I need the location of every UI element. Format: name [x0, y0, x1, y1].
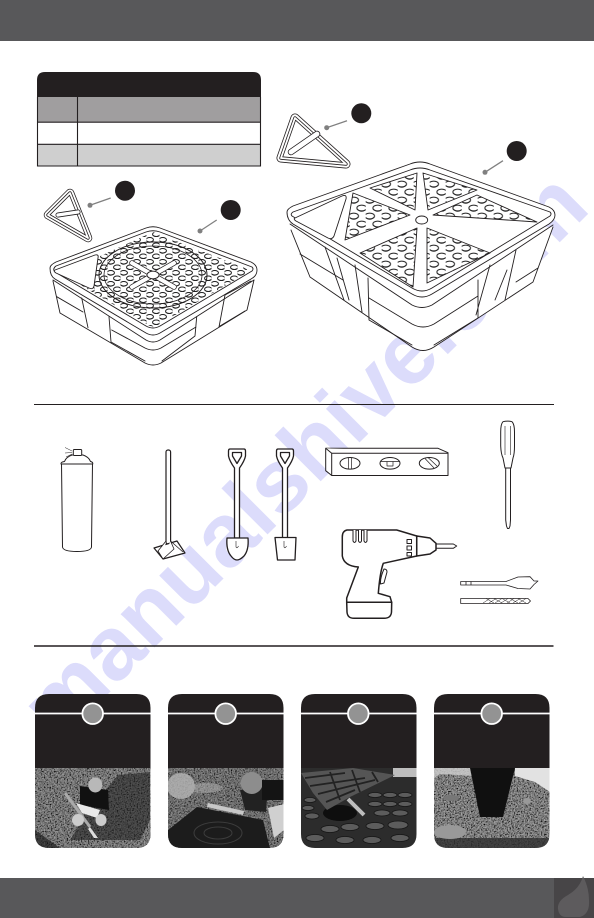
- icon: spade bit: [461, 577, 538, 589]
- icon: screwdriver: [501, 421, 514, 528]
- page tab: [554, 878, 594, 918]
- step card 3: [301, 694, 417, 848]
- table row 2: [38, 122, 260, 144]
- card 1 header: [35, 694, 150, 768]
- icon: flame drop: [558, 876, 589, 917]
- table row 3: [38, 144, 260, 166]
- wedge hole grid: [346, 174, 531, 286]
- spoke star: [132, 263, 174, 287]
- large empty corner: [294, 195, 346, 239]
- step card 4: [434, 694, 550, 848]
- card 3 number badge: [348, 703, 369, 724]
- large container body: [291, 227, 553, 350]
- icon: hand tamper: [154, 450, 185, 559]
- container body: [53, 280, 254, 365]
- wedge outlines: [345, 173, 537, 287]
- icon: spray can: [61, 448, 93, 552]
- card 4 number badge: [481, 703, 502, 724]
- small container illustration: [50, 225, 260, 365]
- card 2 rule: [168, 712, 284, 714]
- card 1 number badge: [82, 703, 103, 724]
- parts table: [37, 72, 261, 166]
- header band: [0, 0, 594, 41]
- step card 2: [167, 694, 284, 848]
- card 2 header: [168, 694, 284, 768]
- callout large container: [482, 141, 527, 175]
- card 2 number badge: [215, 703, 236, 724]
- small anchor clip: [48, 193, 88, 238]
- large container rim: [287, 162, 555, 297]
- icon: square shovel: [275, 449, 296, 560]
- empty corner: [54, 255, 98, 289]
- table row 1: [38, 97, 260, 122]
- divider: [34, 404, 554, 406]
- card 3 header: [301, 694, 416, 768]
- centre hub: [416, 216, 428, 224]
- card 1 photo: [35, 768, 151, 848]
- icon: twist bit: [461, 598, 530, 604]
- large container illustration: [287, 162, 555, 350]
- card 2 photo: [167, 768, 284, 848]
- container rim: [50, 227, 257, 335]
- table header: [37, 72, 261, 97]
- footer band: [0, 878, 594, 918]
- watermark: manualshive.com: [1, 153, 594, 758]
- icon: spirit level: [326, 448, 448, 476]
- card 3 rule: [301, 712, 416, 714]
- card 1 rule: [35, 712, 150, 714]
- callout small container: [198, 200, 241, 234]
- hole grid: [82, 232, 248, 326]
- icon: cordless drill: [342, 530, 457, 618]
- card 4 rule: [434, 712, 550, 714]
- large anchor clip: [281, 118, 346, 164]
- card 3 photo: [301, 768, 417, 848]
- step card 1: [35, 694, 151, 848]
- icon: round shovel: [227, 449, 248, 560]
- card 4 photo: [434, 768, 550, 848]
- callout large clip: [324, 103, 371, 130]
- callout small clip: [88, 181, 135, 208]
- card 4 header: [434, 694, 550, 768]
- divider: [34, 645, 554, 647]
